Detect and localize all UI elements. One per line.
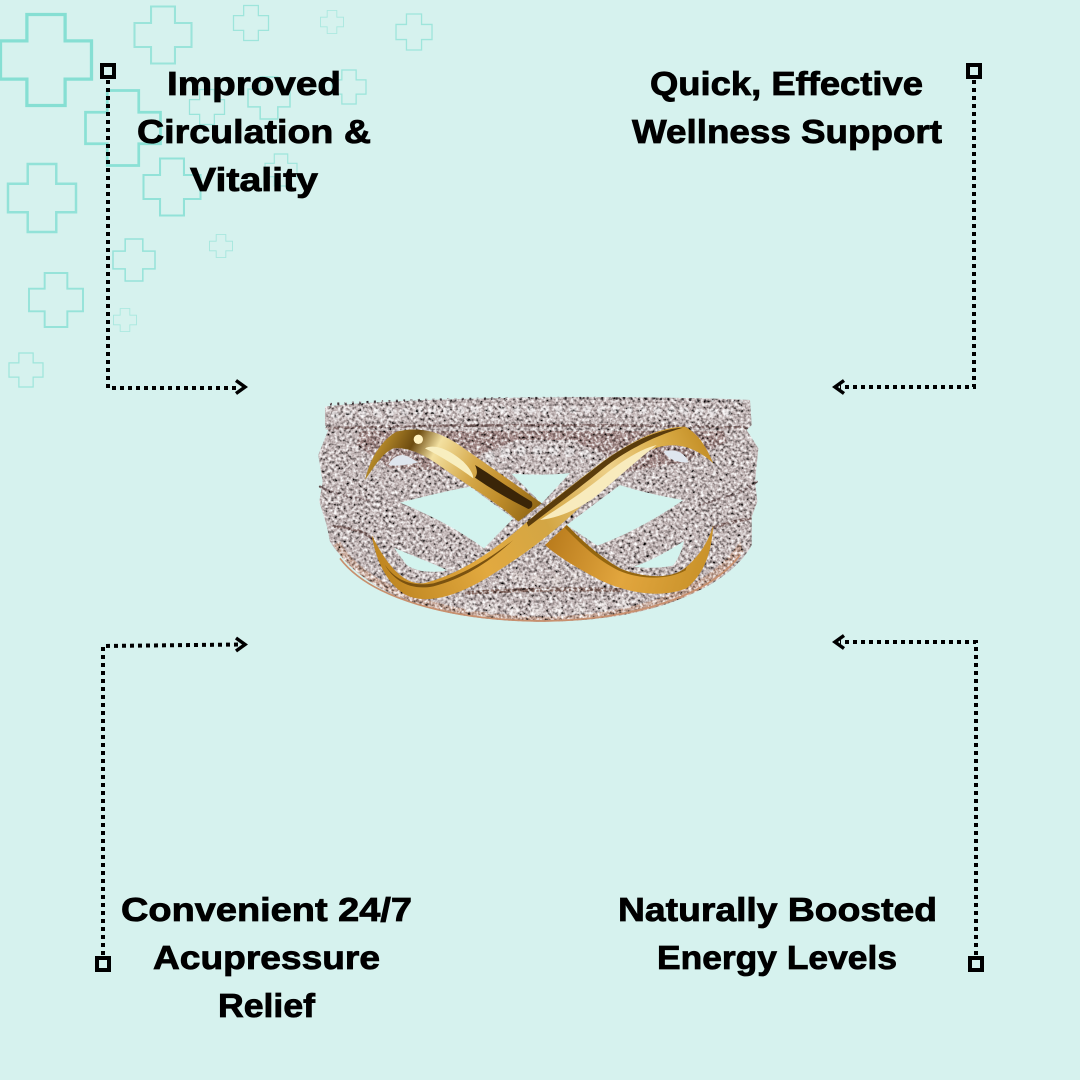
connector: top left: [102, 65, 245, 394]
heading: acupressure relief: Convenient 24/7: [121, 891, 412, 928]
ring: back gold strand: [365, 429, 713, 594]
heading: improved circulation: [137, 65, 371, 198]
ring: openings: [394, 473, 684, 572]
connector: bottom right: [835, 636, 982, 970]
ring: white glints: [388, 450, 688, 466]
ring: rose gold lower edge: [340, 555, 740, 621]
ring: diamond body: [318, 397, 758, 622]
heading: wellness support: Wellness Support: [632, 113, 942, 150]
heading: wellness support: Quick, Effective: [650, 65, 923, 102]
heading: improved circulation: Circulation &: [137, 113, 371, 150]
ring: front gold strand: [372, 427, 713, 599]
heading: wellness support: [632, 65, 942, 150]
heading: improved circulation: Improved: [167, 65, 341, 102]
heading: energy levels: Energy Levels: [657, 939, 897, 976]
heading: acupressure relief: Relief: [218, 987, 316, 1024]
heading: improved circulation: Vitality: [190, 161, 319, 198]
decorative medical crosses: [0, 5, 432, 387]
connector: top right: [835, 65, 980, 394]
heading: energy levels: [618, 891, 937, 976]
connector: bottom left: [97, 638, 245, 970]
ring: gold infinity with pave diamonds: [318, 397, 758, 622]
heading: acupressure relief: [121, 891, 412, 1024]
heading: acupressure relief: Acupressure: [153, 939, 380, 976]
heading: energy levels: Naturally Boosted: [618, 891, 937, 928]
